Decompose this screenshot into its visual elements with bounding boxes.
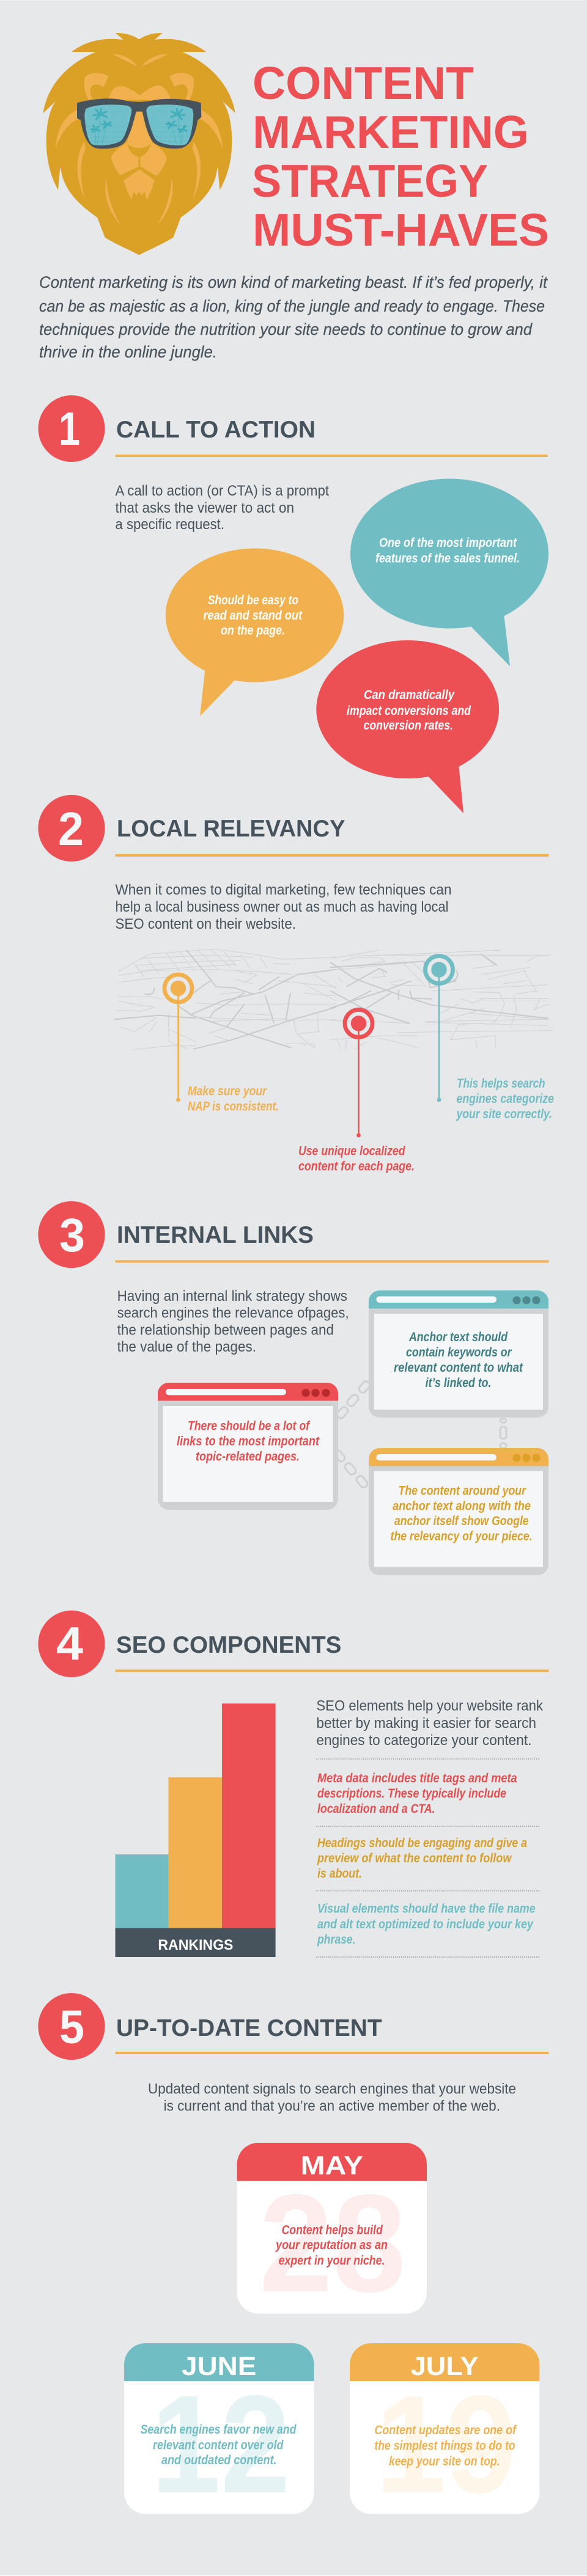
text: meta data: Meta data includes title tags and meta: [317, 1771, 517, 1785]
speech bubble: red: Can dramatically: [364, 688, 455, 702]
speech bubble: red: impact conversions and: [347, 704, 471, 718]
body text: When it comes to digital marketing, few techniques can: [115, 882, 451, 898]
speech bubble: orange: on the page.: [221, 623, 285, 638]
heading: up-to-date content: UP-TO-DATE CONTENT: [116, 2015, 382, 2041]
body text: better by making it easier for search: [316, 1715, 536, 1732]
panel: local relevancy: [38, 795, 554, 1174]
text: headings: preview of what the content to follow: [317, 1851, 512, 1865]
intro text: techniques provide the nutrition your site needs to continue to grow and: [39, 320, 533, 338]
body text: [148, 2081, 516, 2114]
caption: red: Use unique localized: [298, 1144, 405, 1158]
section number 2: 2: [58, 803, 84, 855]
caption: red: content for each page.: [298, 1160, 415, 1174]
browser window: teal: relevant content to what: [394, 1361, 523, 1375]
text: headings: Headings should be engaging and give a: [317, 1836, 527, 1850]
title: CONTENT: [253, 57, 474, 109]
title: MUST-HAVES: [253, 204, 549, 255]
calendar: july: 19: [375, 2367, 517, 2522]
icon: lion with sunglasses: [43, 33, 235, 255]
caption: teal: [456, 1077, 554, 1121]
body text: Updated content signals to search engines that your website: [148, 2081, 516, 2097]
body text: is current and that you’re an active member of the web.: [164, 2098, 500, 2114]
chain links: [333, 1380, 506, 1489]
bar chart: rankings: RANKINGS: [158, 1937, 233, 1953]
intro text: can be as majestic as a lion, king of the jungle and ready to engage. These: [39, 297, 545, 315]
body text: a specific request.: [115, 516, 224, 533]
body text: engines to categorize your content.: [316, 1732, 531, 1749]
calendar: may: 28: [259, 2166, 406, 2321]
browser window: red: links to the most important: [177, 1435, 320, 1449]
body text: [115, 882, 451, 932]
body text: A call to action (or CTA) is a prompt: [115, 483, 329, 499]
calendar: may: MAY: [301, 2151, 363, 2181]
browser window: orange: anchor text along with the: [393, 1499, 531, 1513]
browser window: orange: anchor itself show Google: [394, 1514, 529, 1528]
section number 3: [38, 1201, 105, 1268]
body text: SEO content on their website.: [115, 916, 296, 932]
browser window: orange: the relevancy of your piece.: [391, 1529, 533, 1543]
body text: search engines the relevance ofpages,: [117, 1305, 349, 1322]
heading: call to action: CALL TO ACTION: [116, 417, 316, 443]
text: meta data: descriptions. These typically include: [317, 1787, 506, 1801]
heading: up-to-date content: [115, 2015, 549, 2054]
browser window: teal: Anchor text should: [408, 1330, 508, 1344]
browser window: teal: it’s linked to.: [426, 1376, 491, 1390]
text: visual elements: [317, 1902, 536, 1947]
caption: orange: Make sure your: [188, 1084, 268, 1098]
calendar: june: relevant content over old: [153, 2438, 284, 2452]
text: headings: is about.: [317, 1867, 362, 1881]
section number 2: [38, 795, 105, 862]
heading: seo components: SEO COMPONENTS: [116, 1632, 341, 1658]
title: STRATEGY: [252, 155, 488, 207]
panel: seo components: [38, 1611, 548, 1957]
calendar: june: JUNE: [182, 2352, 256, 2381]
intro text: Content marketing is its own kind of marketing beast. If it’s fed properly, it: [39, 273, 548, 291]
calendar: may: your reputation as an: [275, 2238, 388, 2252]
section number 5: 5: [59, 2001, 84, 2054]
speech bubble: orange: read and stand out: [203, 609, 303, 623]
pin: teal: [426, 956, 452, 1102]
body text: SEO elements help your website rank: [316, 1698, 544, 1714]
calendar: june: Search engines favor new and: [141, 2423, 297, 2437]
heading: internal links: INTERNAL LINKS: [117, 1222, 314, 1248]
title: [252, 57, 549, 255]
section number 3: 3: [59, 1209, 85, 1262]
caption: red: [298, 1144, 415, 1174]
text: headings: [317, 1836, 527, 1881]
panel: internal links: [38, 1201, 548, 1575]
browser window: red: There should be a lot of: [188, 1419, 311, 1433]
bar chart: rankings: [115, 1703, 276, 1957]
browser window: red: [158, 1383, 338, 1510]
map: [114, 949, 552, 1050]
speech bubble: orange: Should be easy to: [208, 593, 298, 607]
body text: help a local business owner out as much as having local: [115, 899, 449, 915]
panel: up-to-date content: [38, 1993, 548, 2522]
speech bubble: teal: [350, 479, 548, 666]
heading: local relevancy: LOCAL RELEVANCY: [117, 816, 345, 842]
section number 5: [38, 1993, 105, 2060]
caption: orange: [188, 1084, 279, 1114]
browser window: orange: [369, 1448, 548, 1575]
heading: seo components: [115, 1632, 549, 1672]
text: visual elements: phrase.: [317, 1933, 356, 1947]
pin: orange: [164, 975, 192, 1102]
calendar: june: and outdated content.: [161, 2453, 276, 2467]
heading: internal links: [115, 1222, 549, 1262]
browser window: orange: The content around your: [399, 1484, 527, 1498]
heading: local relevancy: [115, 816, 549, 857]
calendar: july: Content updates are one of: [374, 2423, 517, 2437]
intro text: [39, 273, 548, 361]
body text: Having an internal link strategy shows: [117, 1288, 347, 1304]
intro text: thrive in the online jungle.: [39, 343, 217, 361]
body text: the relationship between pages and: [117, 1322, 334, 1338]
pin: red: [345, 1009, 372, 1137]
browser window: red: topic-related pages.: [196, 1450, 300, 1464]
caption: teal: engines categorize: [456, 1092, 554, 1106]
caption: orange: NAP is consistent.: [188, 1100, 279, 1114]
calendar: july: keep your site on top.: [389, 2454, 500, 2468]
body text: [316, 1698, 544, 1749]
speech bubble: orange: [166, 549, 344, 716]
panel: call to action: [38, 395, 548, 813]
speech bubble: teal: One of the most important: [379, 536, 517, 550]
speech bubble: red: [316, 640, 499, 813]
body text: [115, 483, 329, 533]
calendar: may: Content helps build: [281, 2223, 383, 2238]
heading: call to action: [115, 417, 548, 457]
body text: [117, 1288, 349, 1355]
text: visual elements: and alt text optimized to include your key: [317, 1917, 534, 1931]
browser window: teal: [369, 1290, 548, 1418]
calendar: june: 12: [151, 2367, 290, 2522]
browser window: teal: contain keywords or: [406, 1345, 512, 1359]
caption: teal: This helps search: [457, 1077, 545, 1091]
section number 1: [38, 395, 105, 462]
text: meta data: [317, 1771, 517, 1816]
icon: sunglasses: [77, 98, 201, 148]
calendar: july: the simplest things to do to: [374, 2439, 515, 2453]
text: visual elements: Visual elements should have the file name: [317, 1902, 536, 1916]
body text: the value of the pages.: [117, 1339, 256, 1355]
speech bubble: red: conversion rates.: [363, 719, 453, 733]
caption: teal: your site correctly.: [456, 1107, 552, 1121]
section number 4: 4: [56, 1618, 83, 1670]
calendar: may: expert in your niche.: [279, 2254, 385, 2268]
calendar: july: JULY: [411, 2352, 479, 2381]
text: meta data: localization and a CTA.: [317, 1802, 435, 1816]
speech bubble: teal: features of the sales funnel.: [375, 551, 520, 566]
section number 4: [38, 1611, 105, 1677]
section number 1: 1: [59, 403, 80, 455]
body text: that asks the viewer to act on: [115, 500, 294, 516]
title: MARKETING: [253, 106, 529, 158]
